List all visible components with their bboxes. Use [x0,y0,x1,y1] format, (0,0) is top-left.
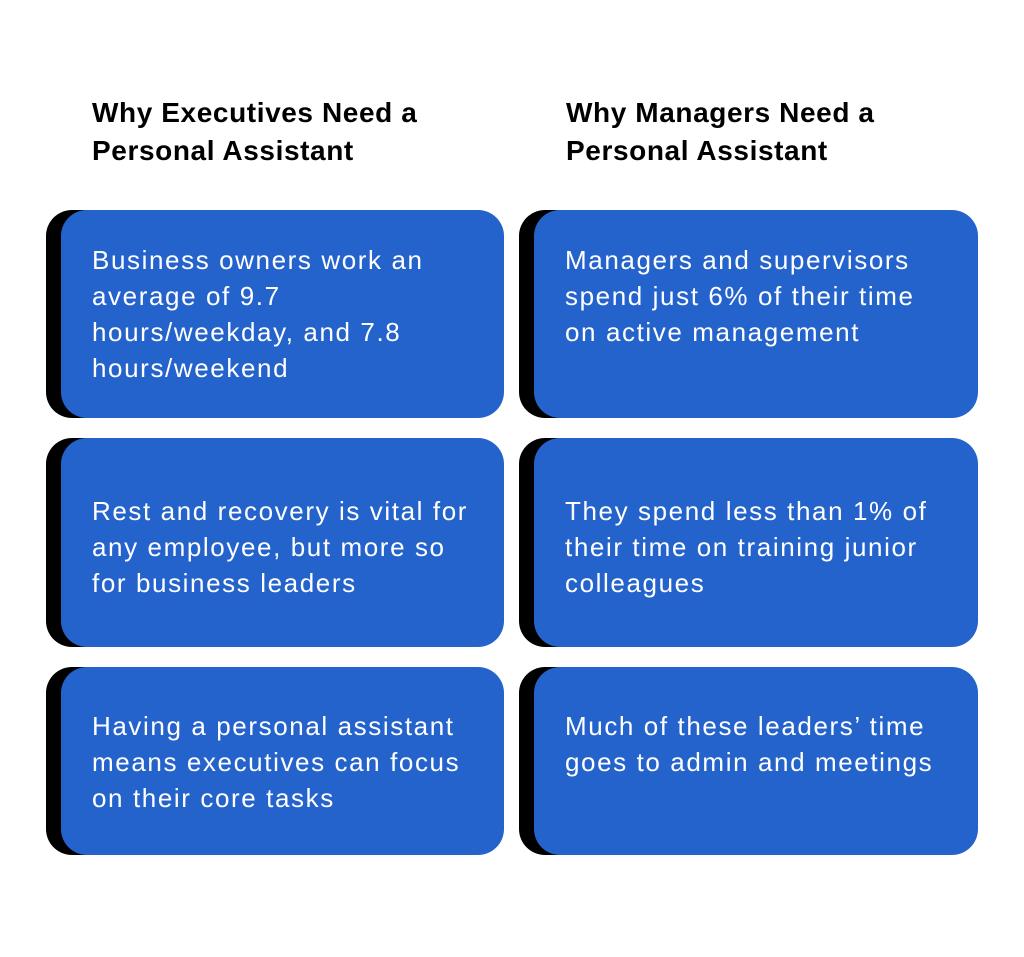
text: means executives can focus [92,747,460,777]
text: Managers and supervisors [565,245,910,275]
text: on their core tasks [92,783,335,813]
title: executives: Personal Assistant [92,135,354,166]
text: any employee, but more so [92,532,446,562]
card: executives 3 [46,667,504,855]
text: hours/weekday, and 7.8 [92,317,401,347]
text: on active management [565,317,860,347]
text: Having a personal assistant [92,711,455,741]
title: executives [92,97,417,166]
text: average of 9.7 [92,281,281,311]
card: managers 1 [519,210,978,418]
title: managers [566,97,875,166]
text: spend just 6% of their time [565,281,915,311]
card: managers 2 [519,438,978,647]
text: Business owners work an [92,245,424,275]
text [92,245,424,383]
text [565,496,927,598]
text: Much of these leaders’ time [565,711,925,741]
text: hours/weekend [92,353,289,383]
title: managers: Personal Assistant [566,135,828,166]
text: for business leaders [92,568,357,598]
text: Rest and recovery is vital for [92,496,468,526]
card: managers 3 [519,667,978,855]
text: colleagues [565,568,705,598]
title: executives: Why Executives Need a [92,97,417,128]
card: executives 2 [46,438,504,647]
text [92,711,460,813]
text [565,245,915,347]
title: managers: Why Managers Need a [566,97,875,128]
text: goes to admin and meetings [565,747,933,777]
card: executives 1 [46,210,504,418]
text [565,711,933,777]
text: They spend less than 1% of [565,496,927,526]
text: their time on training junior [565,532,918,562]
text [92,496,468,598]
